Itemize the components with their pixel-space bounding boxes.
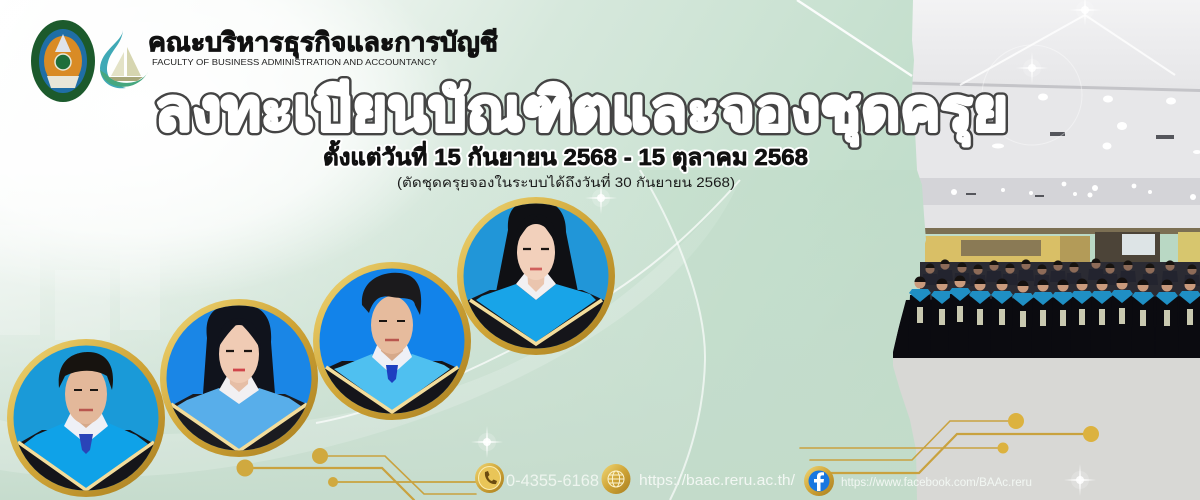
portrait: graduate woman 1 [160,299,318,458]
faculty name Thai: คณะบริหารธุรกิจและการบัญชี [148,27,498,59]
title: ลงทะเบียนบัณฑิตและจองชุดครุย [155,78,1008,147]
circuit lines left [236,448,478,500]
portrait: graduate man 1 [7,339,165,498]
title: ลงทะเบียนบัณฑิตและจองชุดครุย [155,78,1008,147]
logo: faculty sail [100,30,148,88]
registration dates: ตั้งแต่วันที่ 15 กันยายน 2568 - 15 ตุลาคม 2568 [323,140,808,172]
icon: phone [475,463,504,493]
floor [890,358,1200,500]
website url: https://baac.reru.ac.th/ [639,472,796,489]
gown cut-off note: (ตัดชุดครุยจองในระบบได้ถึงวันที่ 30 กันยายน 2568) [397,173,735,191]
icon: globe [602,464,630,494]
graduates front row [893,276,1200,358]
icon: facebook [804,466,834,496]
circuit lines right [800,413,1099,473]
registration dates: ตั้งแต่วันที่ 15 กันยายน 2568 - 15 ตุลาคม 2568 [323,140,808,172]
faculty name English: FACULTY OF BUSINESS ADMINISTRATION AND ACCOUNTANCY [152,58,438,67]
stage backdrop [925,228,1200,262]
portrait: graduate man 2 [313,262,471,421]
ceiling [890,0,1200,231]
sparkles [471,0,1101,496]
phone number: 0-4355-6168 [506,471,599,490]
crowd back rows [920,258,1200,302]
logo: university seal [31,20,95,102]
portrait: graduate woman 2 [457,197,615,356]
graduation photo [890,0,1200,500]
facebook url: https://www.facebook.com/BAAc.reru [841,477,1032,489]
